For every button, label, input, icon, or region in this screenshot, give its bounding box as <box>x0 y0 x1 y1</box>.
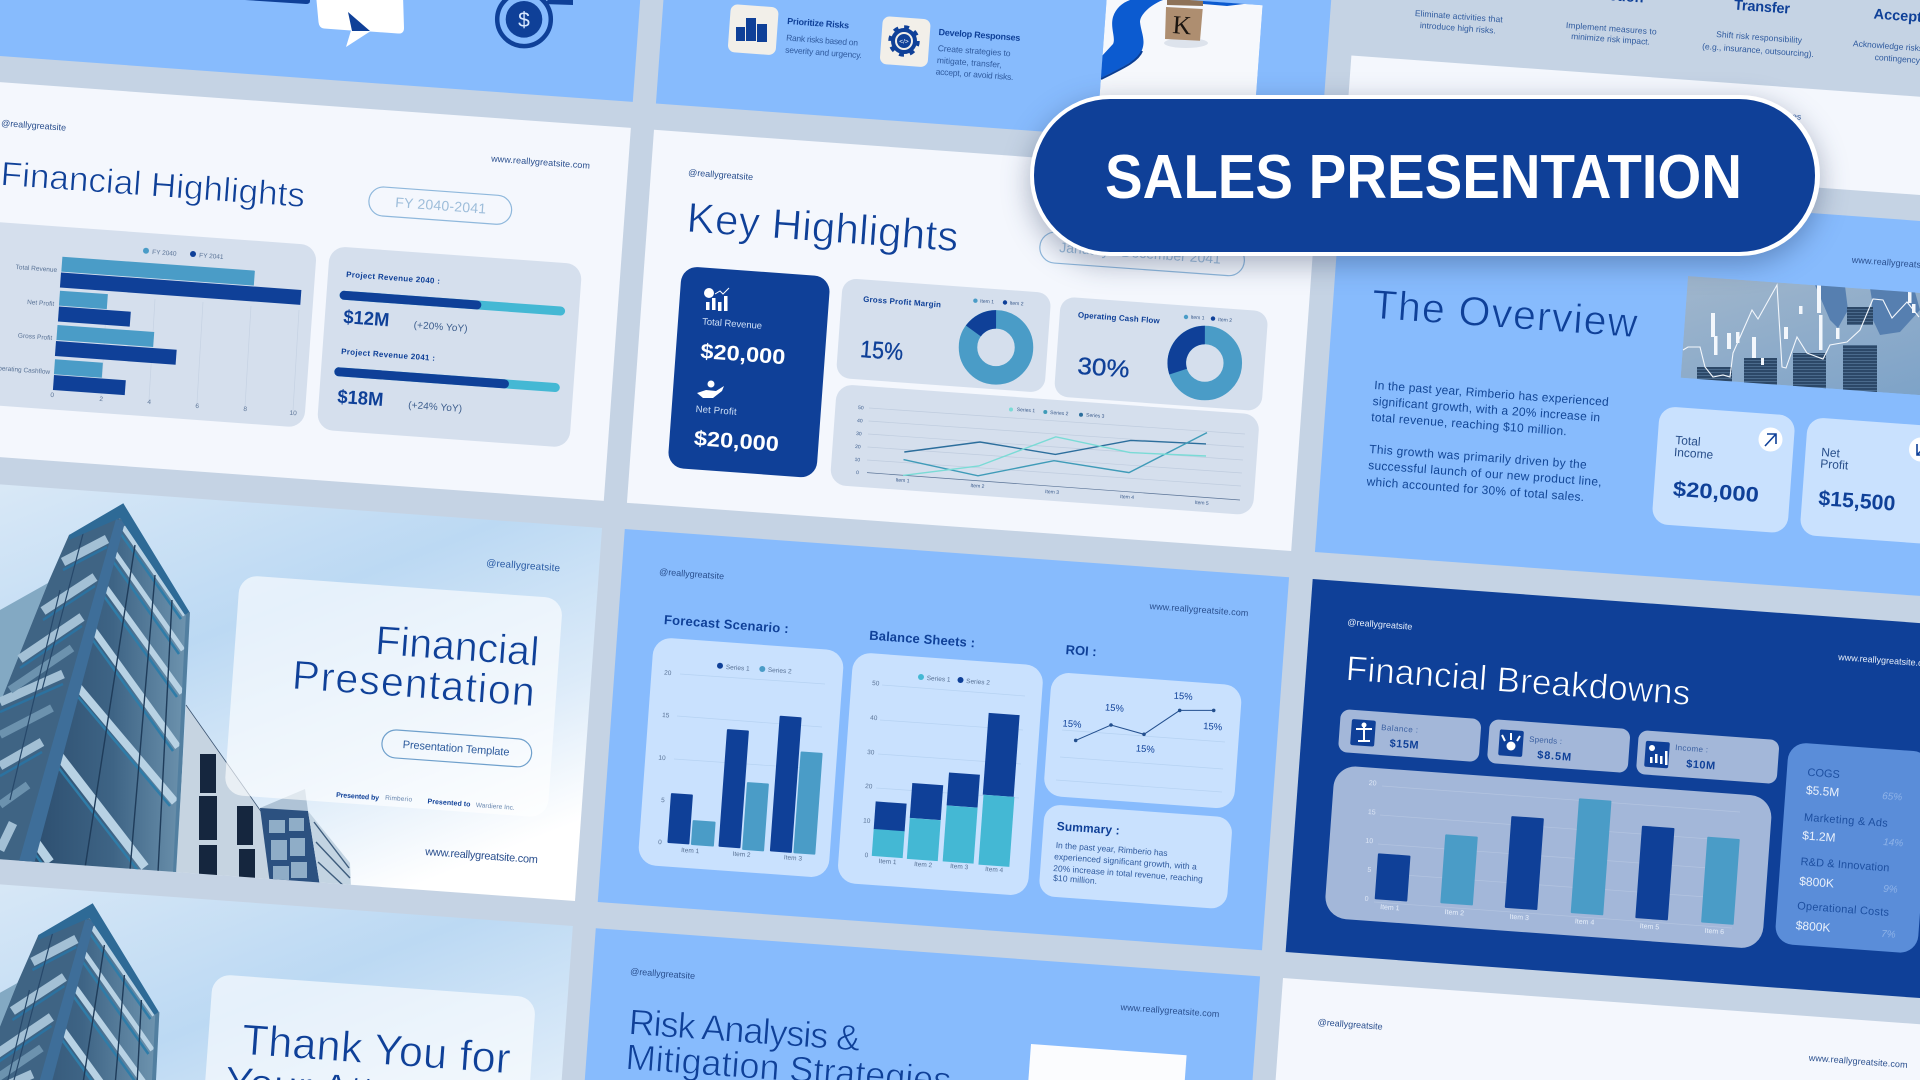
panel: line chart: Item 1 <box>895 477 910 484</box>
title <box>624 1001 953 1080</box>
heading: balance sheets: Balance Sheets : <box>869 628 976 650</box>
panel: bar chart: 2 <box>99 396 104 403</box>
icon: dollar coin: $ <box>518 9 530 32</box>
panel: project revenue: Project Revenue 2041 : <box>341 347 435 363</box>
slide: risk responses <box>1344 0 1920 201</box>
card: total income: Income <box>1673 445 1714 462</box>
website: www.reallygreatsite.com <box>1807 1053 1908 1070</box>
panel: project revenue: Project Revenue 2040 : <box>346 270 440 286</box>
prioritize risks text: Rank risks based on <box>786 33 859 48</box>
panel: forecast bar chart: Item 1 <box>681 847 700 855</box>
transfer description: (e.g., insurance, outsourcing). <box>1702 41 1814 59</box>
panel: cost breakdown: 65% <box>1882 791 1903 803</box>
panel: revenue card: Net Profit <box>695 404 737 418</box>
slide: Thank You <box>0 878 573 1080</box>
panel: line chart: 30 <box>856 431 862 437</box>
slide: Forecast, Balance Sheets and ROI <box>598 529 1289 950</box>
develop responses text: Create strategies to <box>937 43 1011 58</box>
accept description <box>1853 7 1920 68</box>
panel: bar chart: 6 <box>195 403 200 410</box>
panel: project revenue: $18M <box>337 387 384 411</box>
panel: cost breakdown: 9% <box>1883 884 1898 896</box>
panel: project revenue: (+20% YoY) <box>413 320 468 335</box>
handle: @reallygreatsite <box>1317 1017 1383 1032</box>
card: net profit: Profit <box>1820 457 1849 473</box>
template pill <box>381 729 533 768</box>
panel: cost breakdown: 7% <box>1881 929 1896 941</box>
title: Risk Analysis & <box>627 1001 862 1059</box>
panel: bar chart: Item 4 <box>1575 918 1595 927</box>
panel: forecast bar chart <box>638 637 844 878</box>
overview paragraph: significant growth, with a 20% increase in <box>1372 394 1601 424</box>
panel: bar chart: Item 6 <box>1704 928 1724 936</box>
icon: gear tile: </> <box>899 38 909 46</box>
panel: summary: In the past year, Rimberio has <box>1055 840 1168 858</box>
panel: summary: 20% increase in total revenue, reaching <box>1053 863 1203 884</box>
panel: line chart: Item 5 <box>1195 500 1209 507</box>
reduce description: minimize risk impact. <box>1571 31 1650 47</box>
prioritize risks text: severity and urgency. <box>785 45 862 60</box>
panel: bar chart: 20 <box>1368 780 1377 788</box>
panel: bar chart: 10 <box>289 410 297 417</box>
handle: @reallygreatsite <box>659 567 724 581</box>
icon: gear tile <box>880 16 931 67</box>
panel: cost breakdown: $1.2M <box>1802 828 1836 845</box>
slide: Financial Presentation cover <box>0 480 602 901</box>
handle: @reallygreatsite <box>630 966 695 981</box>
white panel <box>1344 56 1920 201</box>
panel: line chart: 10 <box>854 457 861 463</box>
panel: bar chart: Total Revenue <box>15 264 58 274</box>
title: Financial Breakdowns <box>1345 649 1692 713</box>
panel: balance sheets stacked chart: 30 <box>867 749 875 757</box>
website: www.reallygreatsite.com <box>490 153 590 171</box>
bars <box>53 257 301 395</box>
panel: operating cash flow <box>1054 296 1268 411</box>
panel: bar chart: 5 <box>1367 867 1372 874</box>
card: net profit: Net <box>1821 445 1841 460</box>
panel: line chart <box>830 384 1260 515</box>
panel: roi line chart: 15% <box>1135 743 1156 756</box>
panel: project revenue <box>317 246 582 448</box>
overview paragraph: total revenue, reaching $10 million. <box>1371 410 1567 438</box>
panel: balance sheets stacked chart: 50 <box>872 680 880 688</box>
tile: spends <box>1487 719 1631 773</box>
panel: gross profit margin: Item 1 <box>980 299 994 306</box>
panel: forecast bar chart: 5 <box>661 797 665 804</box>
cover title: Presentation <box>291 652 536 715</box>
panel: bar chart: 0 <box>50 392 55 399</box>
panel: cost breakdown: $800K <box>1795 918 1831 935</box>
panel: balance sheets stacked chart <box>837 652 1044 896</box>
tile: balance: $15M <box>1389 738 1419 752</box>
panel: roi line chart: 15% <box>1104 702 1125 715</box>
panel: cost breakdown <box>1774 742 1920 954</box>
panel: balance sheets stacked chart: 0 <box>864 852 869 859</box>
tile: spends: $8.5M <box>1537 749 1572 764</box>
panel: gross profit margin: Gross Profit Margin <box>863 295 941 309</box>
overview paragraph: This growth was primarily driven by the <box>1369 442 1588 472</box>
develop responses text: mitigate, transfer, <box>937 55 1002 70</box>
date pill: January - December 2041 <box>1059 239 1222 267</box>
panel: line chart: 0 <box>856 470 859 476</box>
panel: balance sheets stacked chart: Item 1 <box>878 858 897 866</box>
heading: roi: ROI : <box>1065 642 1097 659</box>
icon: speech bubble <box>316 0 404 47</box>
panel: balance sheets stacked chart: Series 2 <box>966 678 991 687</box>
panel: forecast bar chart: Series 2 <box>768 667 792 676</box>
slide: risk responses: es <box>1792 111 1802 122</box>
avoid description <box>1415 8 1504 35</box>
website: www.reallygreatsite.com <box>424 846 538 866</box>
icon: arrow down left <box>1909 438 1920 462</box>
avoid description: Eliminate activities that <box>1415 8 1504 24</box>
develop responses text: Develop Responses <box>938 27 1021 43</box>
panel: summary: $10 million. <box>1053 873 1097 886</box>
panel: gross profit margin: Item 2 <box>1009 301 1024 308</box>
panel: summary: experienced significant growth, with a <box>1054 851 1197 872</box>
panel: line chart: 50 <box>858 405 864 411</box>
panel: cost breakdown: Marketing & Ads <box>1803 812 1889 830</box>
tile: spends: Spends : <box>1529 735 1562 746</box>
heading: forecast: Forecast Scenario : <box>663 612 789 636</box>
photo: coin stacks and chart <box>1681 276 1920 397</box>
slide: Financial Breakdowns <box>1286 579 1920 1000</box>
panel: gross profit margin <box>836 278 1051 393</box>
panel: bar chart: Net Profit <box>27 299 55 308</box>
slide: Key Highlights <box>627 130 1318 551</box>
panel: bar chart: FY 2041 <box>199 252 224 261</box>
reduce description: Implement measures to <box>1566 20 1657 37</box>
panel: balance sheets stacked chart: 20 <box>865 783 873 791</box>
transfer description: Shift risk responsibility <box>1716 29 1803 45</box>
icon: dollar coin <box>497 0 573 46</box>
presenter details: Wardiere Inc. <box>476 802 515 812</box>
panel: cost breakdown: $5.5M <box>1805 783 1840 799</box>
panel: revenue card: $20,000 <box>693 427 780 456</box>
card: total income: Total <box>1675 433 1701 449</box>
panel: roi line chart: 15% <box>1062 718 1082 731</box>
overview paragraph <box>1365 378 1609 504</box>
tile: balance: Balance : <box>1381 723 1418 735</box>
panel: operating cash flow: 30% <box>1077 353 1130 383</box>
icon: revenue chart <box>704 288 729 311</box>
card: net profit <box>1799 417 1920 545</box>
presenter details: Presented by <box>336 792 379 802</box>
presenter details <box>336 792 515 812</box>
panel: gross profit margin: 15% <box>859 336 904 366</box>
develop responses text: accept, or avoid risks. <box>935 66 1014 82</box>
panel: line chart: Series 3 <box>1086 413 1105 420</box>
panel: forecast bar chart: Item 3 <box>784 854 803 863</box>
card: net profit: $15,500 <box>1818 487 1896 516</box>
date pill: FY 2040-2041 <box>395 194 487 217</box>
handle: @reallygreatsite <box>688 167 753 182</box>
panel: operating cash flow: Item 1 <box>1190 315 1205 322</box>
presenter details: Rimberio <box>385 795 413 804</box>
panel: line chart: Series 2 <box>1050 410 1069 417</box>
photo: risk blocks: K <box>1172 10 1193 40</box>
panel: operating cash flow: Operating Cash Flow <box>1078 311 1161 325</box>
panel: balance sheets stacked chart: Series 1 <box>926 675 951 684</box>
title: Financial Highlights <box>0 155 306 215</box>
panel: revenue card: $20,000 <box>700 340 786 369</box>
panel: bar chart: Item 5 <box>1639 923 1659 931</box>
date pill <box>1039 231 1245 277</box>
glass card <box>224 575 563 818</box>
panel: line chart: 20 <box>855 444 861 450</box>
slide: Financial Highlights <box>0 80 631 501</box>
panel: line chart: Series 1 <box>1017 407 1036 414</box>
icon: hand with coin <box>697 380 724 398</box>
panel: bar chart: Item 3 <box>1509 914 1529 922</box>
panel: balance sheets stacked chart: 40 <box>870 715 878 722</box>
panel: bar chart: Item 1 <box>1380 904 1400 912</box>
cover title: Financial <box>374 617 541 675</box>
panel: forecast bar chart: 20 <box>664 670 672 677</box>
tile: income: Income : <box>1675 743 1708 754</box>
panel: cost breakdown: COGS <box>1807 767 1840 781</box>
icon: arrow up right <box>1758 428 1782 452</box>
template pill: Presentation Template <box>402 739 510 759</box>
donut chart <box>957 308 1035 387</box>
prioritize risks text <box>785 16 862 60</box>
icon: bar chart tile <box>728 4 779 55</box>
tile: income: $10M <box>1686 758 1716 772</box>
overview paragraph: In the past year, Rimberio has experienced <box>1374 378 1609 409</box>
panel: bar chart: 10 <box>1365 838 1374 845</box>
slide: risk process <box>656 0 1332 132</box>
tile: income <box>1636 730 1780 784</box>
avoid description: introduce high risks. <box>1420 20 1496 35</box>
panel: bar chart <box>1324 765 1773 949</box>
panel: forecast bar chart: Item 2 <box>732 851 751 859</box>
cover title <box>291 617 541 715</box>
photo: risk blocks <box>1100 0 1262 96</box>
panel: bar chart: 15 <box>1368 809 1376 817</box>
panel: operating cash flow: Item 2 <box>1218 317 1232 324</box>
panel: line chart: Item 3 <box>1045 489 1059 496</box>
panel: roi line chart: 15% <box>1203 721 1223 733</box>
panel: bar chart: Item 2 <box>1444 909 1464 917</box>
card: total income: $20,000 <box>1672 478 1760 507</box>
prioritize risks text: Prioritize Risks <box>787 16 849 30</box>
slide: Risk Analysis <box>569 928 1260 1080</box>
reduce description <box>1566 0 1657 47</box>
panel: revenue card: Total Revenue <box>702 317 762 332</box>
tile: balance <box>1338 709 1482 762</box>
panel: line chart: Item 2 <box>970 483 985 490</box>
presenter details: Presented to <box>427 798 471 809</box>
panel: roi line chart: 15% <box>1173 691 1194 703</box>
panel: forecast bar chart: 15 <box>662 712 670 720</box>
panel: cost breakdown: R&D & Innovation <box>1800 856 1890 874</box>
overview paragraph: successful launch of our new product line, <box>1368 458 1602 489</box>
donut chart <box>1170 328 1240 398</box>
panel: cost breakdown: $800K <box>1799 874 1834 891</box>
panel: line chart: 40 <box>857 418 863 424</box>
handle: @reallygreatsite <box>1347 617 1413 632</box>
white image block <box>1026 1044 1187 1080</box>
building photo <box>0 903 160 1080</box>
panel: project revenue: $12M <box>343 307 390 331</box>
panel: bar chart: Gross Profit <box>18 333 53 342</box>
panel: forecast bar chart: 0 <box>658 839 662 846</box>
panel: forecast bar chart: 10 <box>658 755 666 762</box>
website: www.reallygreatsite.com <box>1119 1002 1220 1019</box>
panel: balance sheets stacked chart: Item 4 <box>985 866 1004 874</box>
title: Key Highlights <box>685 194 960 260</box>
banner: sales presentation <box>1030 95 1820 256</box>
panel: cost breakdown: 14% <box>1883 837 1904 849</box>
handle: @reallygreatsite <box>1 118 66 133</box>
panel: revenue card <box>667 266 831 478</box>
handle: @reallygreatsite <box>486 558 561 574</box>
panel: roi line chart <box>1043 672 1242 809</box>
develop responses text <box>935 27 1021 82</box>
card: total income <box>1651 406 1796 534</box>
building photo <box>0 503 351 888</box>
panel: balance sheets stacked chart: 10 <box>863 818 871 825</box>
slide: The Overview <box>1315 179 1920 600</box>
panel: bar chart <box>0 221 317 428</box>
overview paragraph: which accounted for 30% of total sales. <box>1365 474 1585 504</box>
panel: cost breakdown: Operational Costs <box>1797 900 1890 919</box>
panel: balance sheets stacked chart: Item 2 <box>914 861 933 869</box>
panel: line chart: Item 4 <box>1120 494 1134 501</box>
panel: bar chart: 4 <box>147 399 152 406</box>
date pill <box>368 186 513 225</box>
panel: bar chart: 8 <box>243 406 248 413</box>
panel: balance sheets stacked chart: Item 3 <box>950 863 969 871</box>
slide: top left icons <box>0 0 660 102</box>
title: The Overview <box>1370 281 1639 346</box>
panel: summary: Summary : <box>1056 819 1120 838</box>
banner text: SALES PRESENTATION <box>1105 143 1742 212</box>
panel: bar chart: FY 2040 <box>152 249 177 258</box>
panel: forecast bar chart: Series 1 <box>726 664 750 673</box>
transfer description <box>1702 0 1814 59</box>
glass card <box>197 974 536 1080</box>
panel: bar chart: 0 <box>1364 896 1369 903</box>
panel: project revenue: (+24% YoY) <box>408 400 462 415</box>
slide: bottom right white <box>1256 978 1920 1080</box>
website: www.reallygreatsite.com <box>1148 601 1249 618</box>
panel: summary <box>1038 804 1233 909</box>
